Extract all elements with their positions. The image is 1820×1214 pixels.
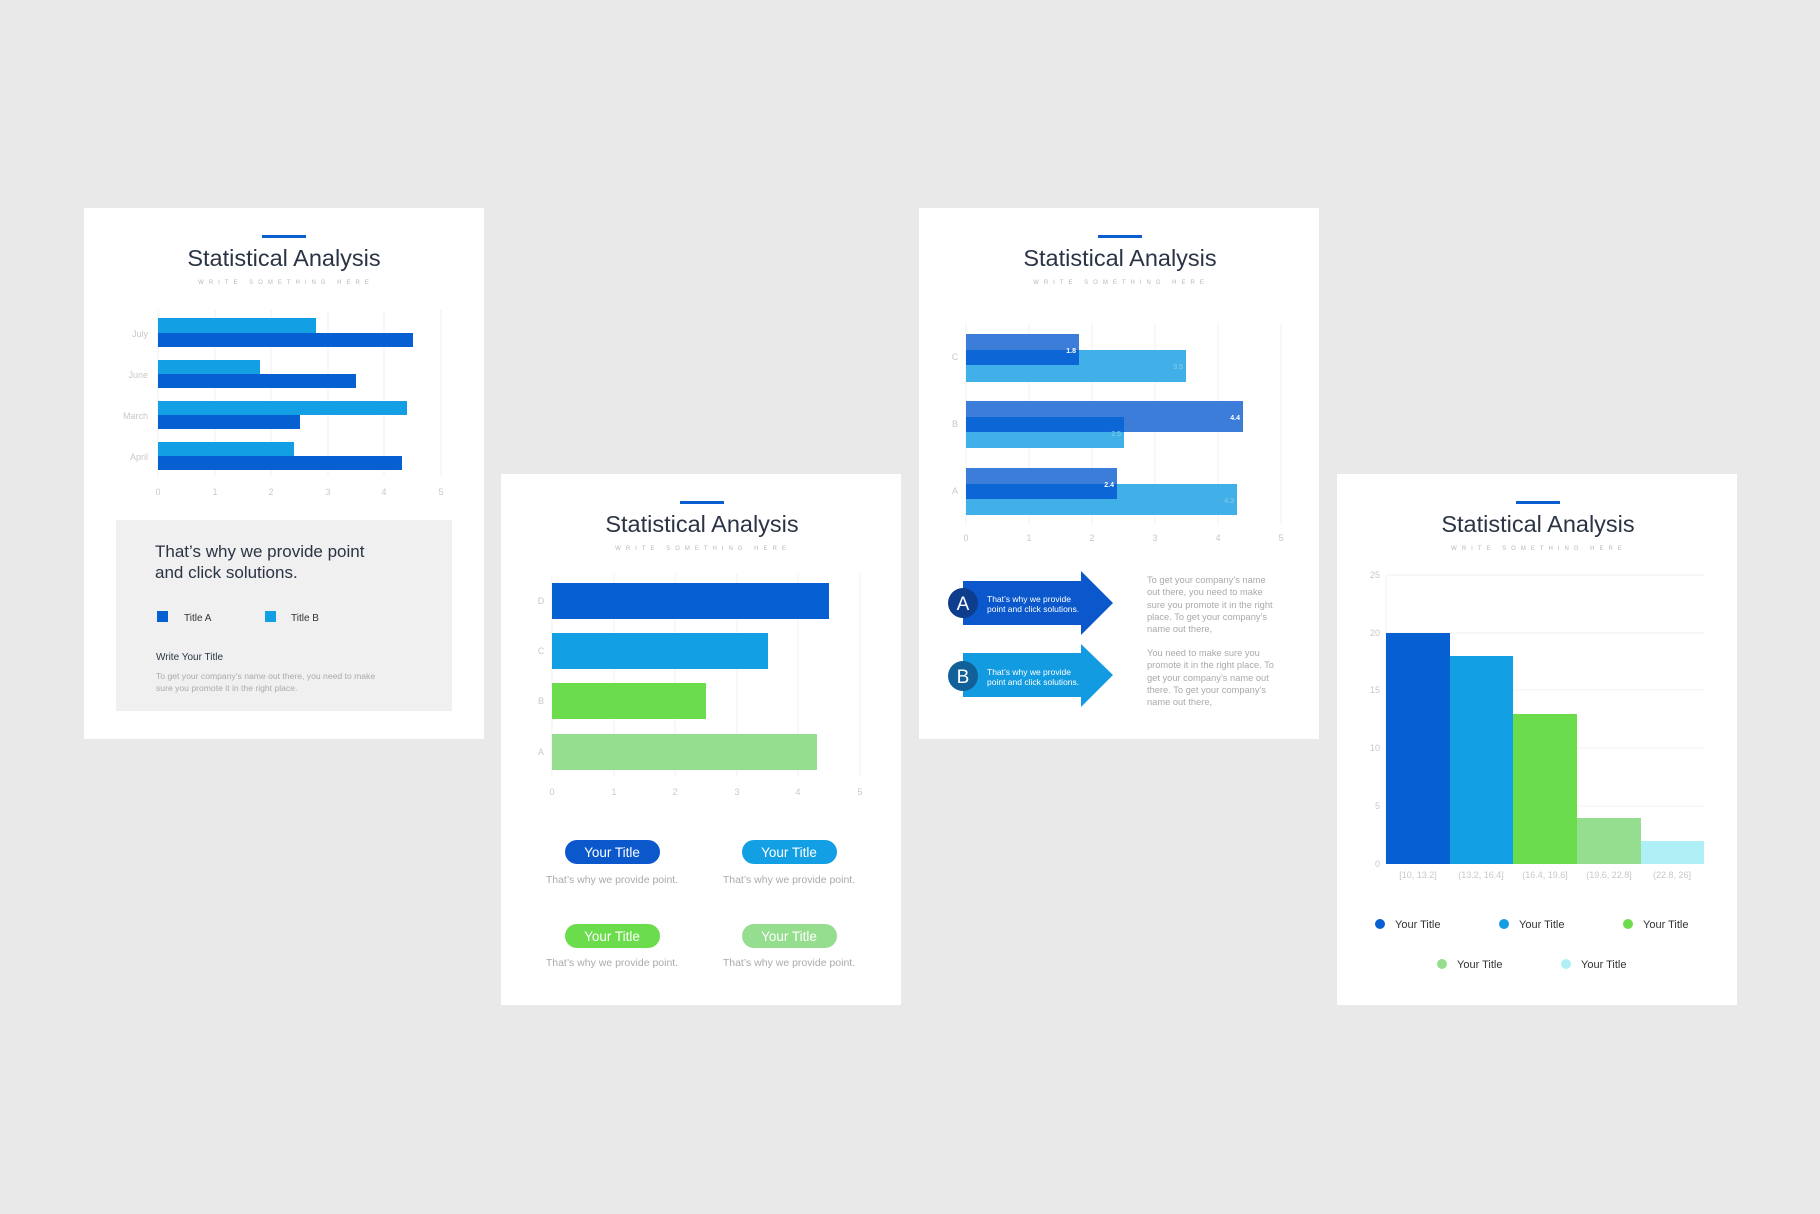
bar chart: overlapping: 4.4	[1230, 415, 1240, 422]
heading: card 4 title: Statistical Analysis	[1441, 511, 1635, 537]
bar chart: overlapping: 1	[1026, 533, 1032, 543]
text block: descriptions: out there, you need to make	[1147, 587, 1263, 597]
histogram chart: 5	[1375, 801, 1380, 811]
bar chart: overlapping: 5	[1278, 533, 1284, 543]
heading: card 2 title: Statistical Analysis	[605, 511, 799, 537]
heading: card 1 title	[187, 235, 381, 286]
histogram chart: (13.2, 16.4]	[1458, 870, 1504, 880]
bar chart: A-D: 5	[857, 787, 863, 797]
histogram chart: (16.4, 19.6]	[1522, 870, 1568, 880]
bar chart: A-D: C	[538, 646, 545, 656]
arrow: B	[948, 644, 1113, 707]
text block: descriptions	[1147, 575, 1274, 707]
pills: titles	[546, 840, 855, 969]
panel: grey info box: sure you promote it in the right place.	[156, 683, 297, 693]
legend: Your Title	[1395, 919, 1440, 931]
panel: grey info box: Write Your Title	[156, 652, 224, 663]
legend: Your Title	[1519, 919, 1564, 931]
arrow: B: B	[957, 667, 969, 688]
pills: titles: That’s why we provide point.	[723, 957, 855, 969]
arrow: A	[948, 571, 1113, 635]
bar chart: months: June	[128, 370, 148, 380]
histogram chart: 10	[1370, 743, 1380, 753]
histogram chart: 0	[1375, 859, 1380, 869]
bar chart: months: 4	[381, 487, 387, 497]
histogram chart: 25	[1370, 570, 1380, 580]
text block: descriptions: place. To get your company’s	[1147, 612, 1267, 622]
bar chart: months: 3	[325, 487, 331, 497]
histogram chart: 20	[1370, 628, 1380, 638]
panel: grouped horizontal bar chart card	[84, 208, 484, 739]
bar chart: overlapping: 0	[963, 533, 969, 543]
legend: Your Title	[1457, 959, 1502, 971]
bar chart: overlapping: 3.5	[1173, 364, 1183, 371]
bar chart: overlapping: 4.3	[1224, 498, 1234, 505]
arrow: A: point and click solutions.	[987, 604, 1079, 614]
pills: titles: Your Title	[584, 929, 640, 944]
pills: titles: That’s why we provide point.	[723, 874, 855, 886]
panel: single bar chart card with pills	[501, 474, 901, 1005]
legend: Your Title	[1581, 959, 1626, 971]
text block: descriptions: name out there,	[1147, 624, 1212, 634]
panel: overlapping bar chart with arrows	[919, 208, 1319, 739]
bar chart: months: April	[130, 452, 148, 462]
pills: titles: That’s why we provide point.	[546, 957, 678, 969]
bar chart: A-D: A	[538, 747, 544, 757]
arrow: B: That’s why we provide	[987, 667, 1071, 677]
heading: card 3 title: WRITE SOMETHING HERE	[1033, 280, 1209, 286]
bar chart: overlapping	[952, 324, 1284, 543]
bar chart: overlapping: 4	[1215, 533, 1221, 543]
panel: grey info box: Title B	[291, 613, 319, 624]
heading: card 1 title: Statistical Analysis	[187, 245, 381, 271]
panel: grey info box: To get your company’s name out there, you need to make	[156, 671, 375, 681]
arrow: B: point and click solutions.	[987, 677, 1079, 687]
pills: titles: That’s why we provide point.	[546, 874, 678, 886]
bar chart: overlapping: 1.8	[1066, 348, 1076, 355]
legend	[1375, 919, 1688, 971]
legend: Your Title	[1643, 919, 1688, 931]
bar chart: A-D: B	[538, 696, 544, 706]
text block: descriptions: You need to make sure you	[1147, 648, 1260, 658]
text block: descriptions: there. To get your company’s	[1147, 685, 1266, 695]
bar chart: overlapping: 3	[1152, 533, 1158, 543]
bar chart: months: 2	[268, 487, 274, 497]
text block: descriptions: promote it in the right place. To	[1147, 660, 1274, 670]
heading: card 2 title: WRITE SOMETHING HERE	[615, 546, 791, 552]
bar chart: A-D: 2	[672, 787, 678, 797]
histogram chart	[1370, 570, 1704, 880]
panel: grey info box: and click solutions.	[155, 563, 298, 582]
bar chart: overlapping: C	[952, 352, 959, 362]
panel: grey info box	[116, 520, 452, 711]
histogram chart: (22.8, 26]	[1653, 870, 1691, 880]
bar chart: months: 1	[212, 487, 218, 497]
text block: descriptions: name out there,	[1147, 697, 1212, 707]
histogram chart: 15	[1370, 685, 1380, 695]
arrow: A: That’s why we provide	[987, 594, 1071, 604]
heading: card 3 title: Statistical Analysis	[1023, 245, 1217, 271]
bar chart: months: 5	[438, 487, 444, 497]
bar chart: months: July	[132, 329, 148, 339]
heading: card 1 title: WRITE SOMETHING HERE	[198, 280, 374, 286]
pills: titles: Your Title	[761, 845, 817, 860]
panel: grey info box: That’s why we provide point	[155, 542, 365, 561]
pills: titles: Your Title	[761, 929, 817, 944]
pills: titles: Your Title	[584, 845, 640, 860]
bar chart: A-D: 0	[549, 787, 555, 797]
bar chart: A-D: 3	[734, 787, 740, 797]
histogram chart: [10, 13.2]	[1399, 870, 1437, 880]
bar chart: A-D	[538, 574, 863, 797]
heading: card 3 title	[1023, 235, 1217, 286]
text block: descriptions: sure you promote it in the right	[1147, 600, 1273, 610]
bar chart: A-D: 1	[611, 787, 617, 797]
text block: descriptions: get your company’s name out	[1147, 673, 1269, 683]
text block: descriptions: To get your company’s name	[1147, 575, 1266, 585]
bar chart: overlapping: B	[952, 419, 958, 429]
bar chart: A-D: 4	[795, 787, 801, 797]
panel: grey info box: Title A	[184, 613, 212, 624]
arrow: A: A	[957, 594, 970, 615]
heading: card 2 title	[605, 501, 799, 552]
bar chart: overlapping: 2.4	[1104, 482, 1114, 489]
heading: card 4 title: WRITE SOMETHING HERE	[1451, 546, 1627, 552]
heading: card 4 title	[1441, 501, 1635, 552]
bar chart: months: March	[123, 411, 148, 421]
histogram chart: (19.6, 22.8]	[1586, 870, 1632, 880]
bar chart: overlapping: 2	[1089, 533, 1095, 543]
panel: histogram card	[1337, 474, 1737, 1005]
bar chart: overlapping: A	[952, 486, 958, 496]
bar chart: A-D: D	[538, 596, 545, 606]
bar chart: overlapping: 2.5	[1111, 431, 1121, 438]
bar chart: months	[123, 310, 444, 497]
bar chart: months: 0	[155, 487, 161, 497]
